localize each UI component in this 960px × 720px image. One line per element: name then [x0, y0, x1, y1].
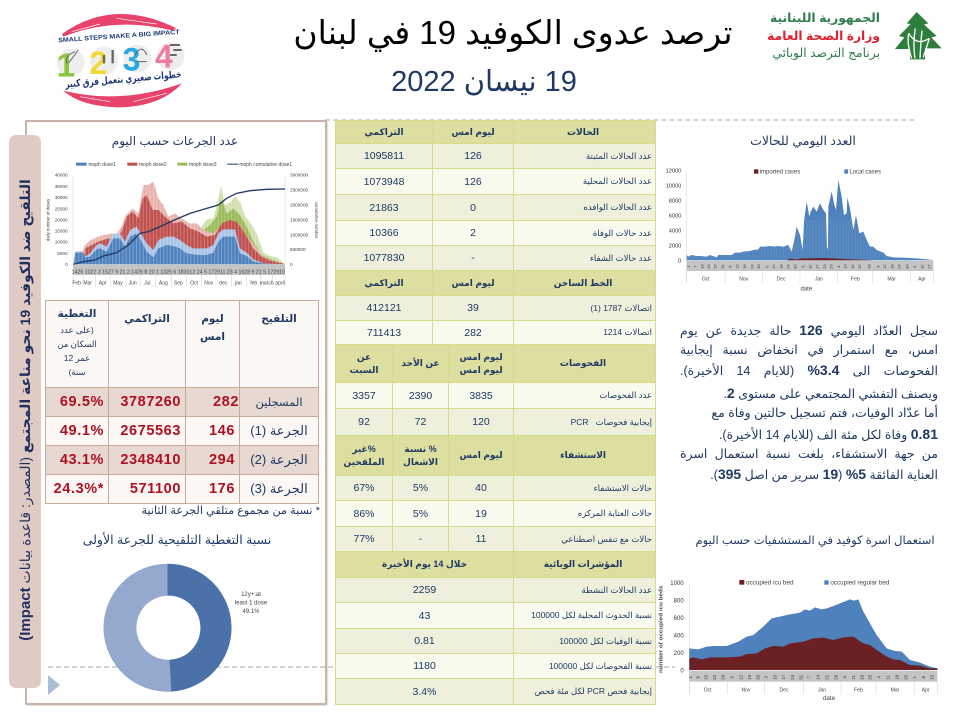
- header row: ليوم: [201, 313, 224, 325]
- chart: daily cases: 19: [706, 264, 711, 269]
- chart: hospital bed occupancy: 25: [868, 674, 873, 680]
- legend: moph cumulative dose1: [239, 162, 292, 168]
- chart: hospital bed occupancy: number of occupied icu beds: [659, 585, 665, 673]
- row: dose 3: 176: [209, 481, 235, 497]
- chart: hospital bed occupancy: 10: [773, 674, 778, 680]
- chart: hospital bed occupancy: 1: [912, 676, 917, 679]
- section: epidemiological indicators: المؤشرات الوبائية: [544, 559, 622, 569]
- table: surveillance indicators: [335, 120, 656, 705]
- section: hospitalisation: الاستشفاء: [560, 450, 606, 460]
- y axis: 0: [678, 258, 681, 264]
- text block: daily summary: ويصنف التفشي المجتمعي على مستوى 2.: [723, 385, 938, 401]
- chart: daily vaccine doses: Jul: [144, 281, 151, 287]
- header row: التغطية: [58, 308, 96, 320]
- row: registered: [46, 388, 318, 416]
- y axis: 200: [674, 651, 684, 657]
- chart: hospital bed occupancy: Oct: [704, 688, 712, 694]
- section: hospitalisation: حالات مع تنفس اصطناعي: [561, 534, 652, 544]
- legend: moph dose2: [139, 162, 167, 168]
- section: cases: 0: [470, 202, 476, 214]
- chart: hospital bed occupancy: [658, 579, 938, 702]
- right axis: 500000: [290, 247, 306, 252]
- chart: hospital bed occupancy: 26: [755, 674, 760, 680]
- left axis: 0: [65, 262, 68, 267]
- row: dose 3: الجرعة (3): [250, 481, 308, 496]
- text block: daily summary: [680, 322, 938, 482]
- right axis: 1500000: [290, 217, 309, 222]
- section: cases: [336, 121, 655, 270]
- chart: daily cases: Apr: [918, 277, 926, 283]
- chart: daily cases: 11: [919, 264, 924, 269]
- section: hospitalisation: حالات العناية المركزه: [578, 508, 652, 518]
- section: hotline: 412121: [366, 302, 402, 314]
- chart: hospital bed occupancy: 21: [824, 674, 829, 680]
- row: registered: 3787260: [120, 394, 181, 410]
- chart: hospital bed occupancy: Nov: [742, 688, 751, 694]
- heading: first dose coverage: نسبة التغطية التلقيحية للجرعة الأولى: [83, 533, 271, 547]
- chart: hospital bed occupancy: 28: [833, 674, 838, 680]
- y axis: 6000: [669, 213, 681, 219]
- chart: hospital bed occupancy: Dec: [780, 688, 789, 694]
- row: dose 1: [46, 417, 318, 445]
- chart: daily cases: 5: [800, 265, 805, 268]
- row: dose 1: الجرعة (1): [250, 423, 308, 438]
- chart: hospital bed occupancy: 14: [815, 674, 820, 680]
- chart: hospital bed occupancy: 1: [688, 676, 693, 679]
- legend: [739, 579, 890, 586]
- section: tests: 72: [415, 416, 426, 428]
- header row: السكان من: [57, 339, 97, 349]
- chart: hospital bed occupancy: 4: [877, 676, 882, 679]
- section: epidemiological indicators: إيجابية فحص PCR لكل مئة فحص: [535, 686, 652, 696]
- section: cases: 2: [470, 227, 476, 239]
- right axis: 2500000: [290, 188, 309, 193]
- row: registered: 69.5%: [60, 394, 104, 410]
- chart: hospital bed occupancy: 12: [739, 674, 744, 680]
- chart: hospital bed occupancy: 5: [730, 676, 735, 679]
- chart: daily cases: 18: [779, 264, 784, 269]
- legend: Local cases: [849, 169, 881, 175]
- right axis: [290, 173, 309, 267]
- section: hospitalisation: 5%: [413, 508, 428, 520]
- right axis: 0: [290, 262, 293, 267]
- logo: small steps make a big impact: [56, 14, 184, 108]
- chart: daily cases: date: [800, 287, 813, 293]
- chart: hospital bed occupancy: Jan: [818, 688, 826, 694]
- chart: daily vaccine doses: Aug: [159, 281, 168, 287]
- row: dose 2: 294: [209, 452, 235, 468]
- section: tests: 120: [472, 416, 490, 428]
- left axis: 30000: [55, 195, 68, 200]
- section: tests: عن: [357, 352, 371, 362]
- chart: hospital bed occupancy: date: [823, 695, 836, 702]
- section: hospitalisation: 5%: [413, 482, 428, 494]
- section: hotline: اتصالات 1787 (1): [590, 302, 652, 312]
- chart: daily vaccine doses: daily number of doses: [45, 199, 50, 241]
- chart: daily vaccine doses: dec: [219, 281, 228, 287]
- chart: donut coverage: 49.1%: [242, 609, 260, 615]
- section: epidemiological indicators: نسبة الحدوث المحلية لكل 100000: [531, 610, 652, 620]
- y axis: 1000: [670, 581, 684, 587]
- section: tests: عن الأحد: [401, 358, 440, 368]
- legend: occupied regular bed: [830, 579, 890, 586]
- heading: daily doses: عدد الجرعات حسب اليوم: [112, 134, 238, 148]
- chart: daily cases: 12: [771, 264, 776, 269]
- chart: daily cases: 6: [875, 265, 880, 268]
- right axis: 1000000: [290, 232, 309, 237]
- chart: daily cases: 30: [904, 264, 909, 269]
- chart: daily cases: 7: [693, 265, 698, 268]
- section: tests: [336, 345, 655, 435]
- header row: (على عدد: [60, 325, 94, 335]
- chart: daily vaccine doses: Apr: [99, 281, 107, 287]
- left axis: 5000: [57, 251, 68, 256]
- chart: daily vaccine doses: Jun: [129, 281, 137, 287]
- footnote: * نسبة من مجموع متلقي الجرعة الثانية: [141, 505, 320, 517]
- section: cases: عدد الحالات المحلية: [583, 176, 652, 186]
- panel: vaccination: [25, 120, 327, 705]
- y axis: 800: [674, 598, 684, 604]
- header row: [46, 301, 318, 503]
- chart: hospital bed occupancy: 19: [747, 674, 752, 680]
- row: dose 1: 49.1%: [60, 423, 104, 439]
- chart: hospital bed occupancy: 18: [894, 674, 899, 680]
- imported cases: [787, 258, 872, 260]
- logo: small steps make a big impact: 4: [155, 38, 173, 74]
- header row: التراكمي: [124, 313, 170, 325]
- left axis: [55, 173, 68, 267]
- heading: daily cases: العدد اليومي للحالات: [750, 134, 856, 148]
- y axis: 400: [674, 633, 684, 639]
- logo: ministry of public health text: الجمهورية اللبنانية: [770, 11, 880, 25]
- chart: daily cases: [666, 168, 934, 293]
- logo: ministry of public health text: [767, 11, 880, 60]
- row: dose 2: الجرعة (2): [250, 452, 308, 467]
- chart: daily cases: Jan: [815, 277, 823, 283]
- chart: daily cases: 17: [927, 264, 932, 269]
- logo: ministry of public health text: وزارة الصحة العامة: [767, 28, 880, 42]
- heading: hospital beds: استعمال اسرة كوفيد في المستشفيات حسب اليوم: [695, 535, 935, 547]
- section: cases: 1095811: [364, 150, 404, 162]
- chart: hospital bed occupancy: 7: [807, 676, 812, 679]
- legend: imported cases: [760, 169, 800, 175]
- y axis: 10000: [666, 184, 681, 190]
- chart: daily vaccine doses: cumulative number: [314, 202, 319, 239]
- section: epidemiological indicators: نسبة الوفيات لكل 100000: [559, 636, 652, 646]
- section: hospitalisation: -: [419, 533, 422, 545]
- y axis: 0: [680, 668, 684, 674]
- chart: daily cases: Nov: [739, 277, 749, 283]
- section: tests: 3357: [352, 390, 376, 402]
- chart: hospital bed occupancy: Feb: [854, 688, 863, 694]
- icu beds area: [689, 637, 937, 670]
- vertical banner: vaccination title: [9, 135, 41, 688]
- chart: hospital bed occupancy: 11: [885, 674, 890, 680]
- chart: hospital bed occupancy: Mar: [891, 688, 900, 694]
- left axis: 25000: [55, 206, 68, 211]
- stacked bars: [73, 180, 285, 264]
- chart: donut coverage: 12y+:at: [241, 592, 261, 598]
- chart: hospital bed occupancy: 8: [696, 676, 701, 679]
- section: cases: -: [471, 252, 475, 264]
- section: epidemiological indicators: خلال 14 يوم الأخيرة: [382, 559, 467, 569]
- section: hotline: 282: [464, 326, 482, 338]
- section: hospitalisation: % نسبة الاشغال: [403, 444, 438, 466]
- row: dose 2: 2348410: [120, 452, 181, 468]
- left axis: 10000: [55, 240, 68, 245]
- chart: daily cases: 6: [728, 265, 733, 268]
- x axis: [687, 261, 933, 271]
- chart: daily cases: Oct: [702, 277, 710, 283]
- text block: daily summary: 0.81 وفاة لكل مئة الف (للايام 14 الأخيرة).: [719, 426, 938, 442]
- chart: daily cases: 22: [857, 264, 862, 269]
- section: hospitalisation: 11: [476, 533, 486, 545]
- logo: small steps make a big impact: 2: [89, 45, 107, 81]
- chart: daily cases: 24: [749, 264, 754, 269]
- chart: daily cases: Mar: [887, 277, 896, 283]
- section: cases: الحالات: [567, 126, 599, 136]
- chart: hospital bed occupancy: 17: [781, 674, 786, 680]
- row: dose 2: [46, 446, 318, 474]
- chart: hospital bed occupancy: 31: [799, 674, 804, 680]
- row: registered: 282: [213, 394, 239, 410]
- section: epidemiological indicators: 43: [419, 610, 430, 622]
- chart: daily cases: 12: [734, 264, 739, 269]
- chart: hospital bed occupancy: Apr: [922, 688, 930, 694]
- banner text: التلقيح ضد الكوفيد 19 نحو مناعة المجتمع (المصدر: قاعدة بيانات Impact): [17, 179, 34, 641]
- row: registered: المسجلين: [255, 397, 303, 409]
- chart: hospital bed occupancy: 11: [851, 674, 856, 680]
- y axis: 600: [674, 616, 684, 622]
- section: hotline: اتصالات 1214: [603, 327, 652, 337]
- text block: daily summary: العناية الفائقة 5% (19 سرير من اصل 395).: [710, 466, 938, 482]
- y axis: [670, 581, 684, 674]
- row: dose 3: [46, 475, 318, 503]
- row: dose 1: 2675563: [120, 423, 181, 439]
- chart: donut coverage: least 1 dose: [235, 600, 268, 606]
- section: epidemiological indicators: 1180: [413, 660, 436, 672]
- chart: daily cases: 31: [720, 264, 725, 269]
- chart: hospital bed occupancy: 29: [721, 674, 726, 680]
- cumulative line: [73, 189, 285, 264]
- chart: daily cases: 29: [829, 264, 834, 269]
- chart: donut coverage: [104, 564, 268, 692]
- chart: daily vaccine doses: Nov: [204, 281, 214, 287]
- chart: daily vaccine doses: May: [113, 281, 123, 287]
- chart: daily cases: 23: [822, 264, 827, 269]
- section: tests: 92: [358, 416, 370, 428]
- chart: hospital bed occupancy: 18: [859, 674, 864, 680]
- section: cases: عدد الحالات الوافده: [583, 202, 652, 212]
- section: cases: عدد حالات الشفاء: [590, 252, 652, 262]
- legend: moph dose1: [88, 162, 116, 168]
- chart: daily cases: 13: [699, 264, 704, 269]
- section: hospitalisation: [336, 436, 655, 551]
- chart: daily cases: 24: [897, 264, 902, 269]
- chart: daily cases: 25: [713, 264, 718, 269]
- section: tests: السبت: [350, 364, 378, 374]
- text block: daily summary: الفحوصات الى 3.4% (للايام 14 الأخيرة).: [680, 362, 938, 378]
- logo: ministry of public health text: برنامج الترصد الوبائي: [772, 46, 880, 60]
- section: tests: ليوم امس: [459, 352, 503, 362]
- section: cases: عدد الحالات المثبتة: [586, 150, 652, 160]
- chart: daily cases: 24: [785, 264, 790, 269]
- chart: daily vaccine doses: Feb: [72, 281, 81, 287]
- chart: hospital bed occupancy: 15: [703, 674, 708, 680]
- chart: daily vaccine doses: Oct: [190, 281, 198, 287]
- chart: daily vaccine doses: [45, 162, 319, 287]
- y axis: [666, 169, 681, 264]
- legend: moph dose3: [189, 162, 217, 168]
- header row: امس: [200, 331, 225, 343]
- text block: daily summary: امس، مع استمرار في انخفاض نسبة إيجابية: [680, 343, 938, 357]
- text block: daily summary: سجل العدّاد اليومي 126 حالة جديدة عن يوم: [680, 322, 938, 338]
- chart: hospital bed occupancy: 15: [929, 674, 934, 680]
- section: epidemiological indicators: 3.4%: [413, 686, 436, 698]
- legend: occupied icu bed: [746, 579, 794, 586]
- chart: daily cases: Feb: [851, 277, 860, 283]
- section: hospitalisation: 67%: [353, 482, 374, 494]
- section: cases: 126: [464, 150, 482, 162]
- section: epidemiological indicators: 0.81: [414, 635, 435, 647]
- chart: daily cases: 10: [843, 264, 848, 269]
- section: hotline: 39: [467, 302, 479, 314]
- local cases area: [687, 180, 933, 260]
- chart: daily cases: 18: [742, 264, 747, 269]
- y axis: 8000: [669, 199, 681, 205]
- section: cases: 126: [464, 176, 482, 188]
- x axis: [689, 671, 937, 682]
- section: cases: 10366: [369, 227, 399, 239]
- section: epidemiological indicators: 2259: [413, 584, 436, 596]
- section: hospitalisation: %غير الملقحين: [344, 444, 384, 466]
- left axis: 20000: [55, 217, 68, 222]
- chart: daily vaccine doses: march: [260, 281, 274, 287]
- chart: hospital bed occupancy: 25: [903, 674, 908, 680]
- chart: daily cases: 12: [882, 264, 887, 269]
- logo: small steps make a big impact: 1: [57, 48, 75, 85]
- section: hotline: التراكمي: [364, 278, 404, 288]
- chart: daily vaccine doses: jan: [234, 281, 242, 287]
- y axis: 2000: [669, 243, 681, 249]
- section: hotline: ليوم امس: [451, 278, 495, 288]
- section: tests: ليوم امس: [459, 364, 503, 374]
- section: tests: 3835: [469, 390, 493, 402]
- date: 19 نيسان 2022: [391, 66, 577, 98]
- x axis: [73, 265, 285, 275]
- section: cases: التراكمي: [364, 126, 404, 136]
- chart: daily cases: 28: [867, 264, 872, 269]
- section: tests: عدد الفحوصات: [599, 390, 652, 400]
- section: cases: 1073948: [364, 176, 404, 188]
- right axis: 2000000: [290, 202, 309, 207]
- title: ترصد عدوى الكوفيد 19 في لبنان: [293, 14, 733, 51]
- chart: daily vaccine doses: feb: [250, 281, 257, 287]
- section: hospitalisation: 40: [475, 482, 487, 494]
- regular beds area: [689, 599, 937, 670]
- row: dose 3: 571100: [130, 481, 181, 497]
- row: dose 1: 146: [209, 423, 235, 439]
- section: hospitalisation: 86%: [353, 508, 374, 520]
- section: cases: ليوم امس: [451, 126, 495, 136]
- chart: hospital bed occupancy: 22: [712, 674, 717, 680]
- logo: small steps make a big impact: 3: [123, 42, 140, 78]
- row: dose 3: 24.3%*: [54, 481, 104, 497]
- chart: daily cases: 4: [836, 265, 841, 268]
- text block: daily summary: أما عدّاد الوفيات، فتم تسجيل حالتين وفاة مع: [711, 406, 938, 420]
- chart: hospital bed occupancy: 24: [790, 674, 795, 680]
- section: hotline: 711413: [367, 326, 401, 338]
- header row: عمر 12: [64, 353, 90, 363]
- logo: small steps make a big impact: SMALL STEPS MAKE A BIG IMPACT: [58, 29, 180, 44]
- chart: daily cases: 6: [764, 265, 769, 268]
- icon: triangle marker: [48, 675, 60, 695]
- chart: daily vaccine doses: april: [275, 281, 285, 287]
- section: epidemiological indicators: [336, 552, 655, 704]
- legend: [754, 169, 881, 175]
- section: tests: إيجابية فحوصات PCR: [571, 416, 652, 426]
- chart: daily vaccine doses: Mar: [83, 281, 92, 287]
- section: hospitalisation: ليوم امس: [459, 450, 503, 460]
- section: epidemiological indicators: عدد الحالات النشطة: [581, 584, 652, 594]
- table: vaccination: [45, 300, 319, 504]
- chart: daily cases: 30: [756, 264, 761, 269]
- section: hospitalisation: 77%: [353, 533, 374, 545]
- chart: daily cases: 17: [814, 264, 819, 269]
- chart: daily cases: 18: [889, 264, 894, 269]
- section: hotline: الخط الساخن: [554, 278, 612, 288]
- section: tests: 2390: [409, 390, 432, 402]
- legend: [76, 162, 292, 168]
- section: epidemiological indicators: نسبة الفحوصات لكل 100000: [549, 660, 652, 670]
- section: cases: 1077830: [364, 252, 404, 264]
- icon: cedar logo: [895, 12, 942, 60]
- section: cases: 21863: [369, 202, 399, 214]
- text block: daily summary: من جهة الاستشفاء، بلغت نسبة استعمال اسرة: [680, 447, 938, 461]
- y axis: 4000: [669, 228, 681, 234]
- chart: hospital bed occupancy: 4: [842, 676, 847, 679]
- row: dose 2: 43.1%: [60, 452, 104, 468]
- left axis: 35000: [55, 184, 68, 189]
- chart: daily vaccine doses: Sep: [174, 281, 183, 287]
- section: tests: الفحوصات: [560, 358, 606, 368]
- header row: التلقيح: [261, 313, 297, 325]
- chart: daily cases: 30: [793, 264, 798, 269]
- chart: daily cases: 1: [686, 265, 691, 268]
- section: hotline: [336, 271, 655, 344]
- left axis: 40000: [55, 173, 68, 178]
- chart: daily vaccine doses: 1426 1022 3 1527 9 21 2 1426 8 20 1 1325 6 183012 24 5 172911 23 4 1628 9 21 5 172910: [72, 270, 285, 276]
- chart: daily cases: 5: [912, 265, 917, 268]
- y axis: 12000: [666, 169, 681, 175]
- chart: daily cases: 16: [850, 264, 855, 269]
- chart: hospital bed occupancy: 3: [764, 676, 769, 679]
- right axis: 3000000: [290, 173, 309, 178]
- section: hospitalisation: حالات الاستشفاء: [594, 482, 652, 492]
- left axis: 15000: [55, 229, 68, 234]
- header row: سنة): [68, 367, 86, 377]
- section: hospitalisation: 19: [475, 508, 487, 520]
- chart: hospital bed occupancy: 8: [921, 676, 926, 679]
- section: cases: عدد حالات الوفاة: [593, 228, 652, 238]
- chart: daily cases: Dec: [777, 277, 786, 283]
- chart: daily cases: 11: [808, 264, 813, 269]
